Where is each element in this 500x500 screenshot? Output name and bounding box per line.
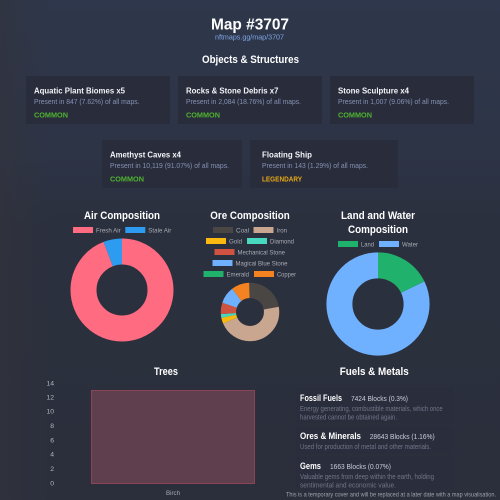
heading: trees: Trees xyxy=(154,366,178,378)
bar chart: trees: 4 xyxy=(50,452,54,458)
panel: fossil fuels xyxy=(296,388,454,423)
donut chart: land and water xyxy=(339,265,417,343)
legend: land and water: Land xyxy=(361,242,374,248)
heading: ore composition: Ore Composition xyxy=(210,210,290,222)
map link: nftmaps.gg/map/3707 xyxy=(215,32,284,42)
panel: ores and minerals: Used for production of metal and other materials. xyxy=(300,444,431,451)
legend: ore: Gold xyxy=(229,238,242,246)
bar chart: trees: 6 xyxy=(50,438,54,444)
panel: fossil fuels: Fossil Fuels xyxy=(300,393,342,403)
heading: fuels and metals: Fuels & Metals xyxy=(340,366,409,378)
card: rocks and stone debris: Rocks & Stone Debris x7 xyxy=(186,86,279,96)
heading: objects and structures: Objects & Structures xyxy=(202,54,299,66)
panel: fossil fuels: 7424 Blocks (0.3%) xyxy=(351,394,408,403)
card: amethyst caves: Amethyst Caves x4 xyxy=(110,150,181,160)
bar chart: trees: 2 xyxy=(50,466,54,473)
panel: ores and minerals xyxy=(296,426,454,454)
card: aquatic plant biomes xyxy=(26,76,170,124)
card: rocks and stone debris: Present in 2,084 (18.76%) of all maps. xyxy=(186,97,301,106)
bar chart: trees: 14 xyxy=(46,380,54,388)
card: floating ship: LEGENDARY xyxy=(262,174,302,184)
legend: air: Fresh Air xyxy=(96,228,121,234)
legend: ore: Coal xyxy=(236,228,249,234)
legend: ore xyxy=(204,227,297,278)
card: rocks and stone debris: COMMON xyxy=(186,110,220,120)
card: rocks and stone debris xyxy=(178,76,322,124)
card: aquatic plant biomes: Aquatic Plant Biomes x5 xyxy=(34,86,125,96)
panel: gems: Valuable gems from deep within the earth, holding xyxy=(300,474,434,481)
card: floating ship: Floating Ship xyxy=(262,150,312,160)
legend: ore: Iron xyxy=(276,228,287,234)
legend: air xyxy=(73,227,172,234)
legend: ore: Emerald xyxy=(226,272,249,278)
legend: land and water: Water xyxy=(402,242,419,248)
donut chart: air composition xyxy=(84,252,160,328)
panel: ores and minerals: 28643 Blocks (1.16%) xyxy=(370,432,435,441)
panel: ores and minerals: Ores & Minerals xyxy=(300,431,361,441)
card: aquatic plant biomes: Present in 847 (7.62%) of all maps. xyxy=(34,97,140,106)
panel: fossil fuels: harvested cannot be obtained again. xyxy=(300,414,397,422)
card: floating ship xyxy=(250,140,398,188)
bar chart: trees: 12 xyxy=(46,394,54,402)
panel: gems: sentimental and economic value. xyxy=(300,482,396,490)
panel: fossil fuels: Energy generating, combustible materials, which once xyxy=(300,406,443,413)
bar chart: trees: Birch xyxy=(166,490,180,497)
legend: ore: Copper xyxy=(277,272,297,278)
card: amethyst caves: COMMON xyxy=(110,174,144,184)
card: amethyst caves: Present in 10,119 (91.07%) of all maps. xyxy=(110,161,229,170)
heading: land and water composition: Land and Water xyxy=(341,210,416,222)
heading: air composition: Air Composition xyxy=(84,210,160,222)
legend: ore: Diamond xyxy=(270,238,294,246)
card: stone sculpture xyxy=(330,76,474,124)
card: amethyst caves xyxy=(102,140,242,188)
title: Map #3707 xyxy=(211,16,289,34)
card: floating ship: Present in 143 (1.29%) of all maps. xyxy=(262,161,368,170)
legend: air: Stale Air xyxy=(148,228,172,234)
panel: gems: 1663 Blocks (0.07%) xyxy=(330,462,391,471)
bar chart: trees: 10 xyxy=(46,408,54,416)
donut chart: ore composition xyxy=(228,290,272,334)
card: stone sculpture: Present in 1,007 (9.06%) of all maps. xyxy=(338,97,449,106)
bar chart: trees xyxy=(46,380,254,497)
card: aquatic plant biomes: COMMON xyxy=(34,110,68,120)
panel: gems: Gems xyxy=(300,461,321,471)
heading: land and water composition xyxy=(341,210,416,236)
legend: ore: Magical Blue Stone xyxy=(236,260,288,268)
legend: land and water xyxy=(338,241,419,248)
legend: ore: Mechanical Stone xyxy=(238,250,285,256)
bar chart: trees: 8 xyxy=(50,423,54,430)
card: stone sculpture: Stone Sculpture x4 xyxy=(338,86,409,96)
bar chart: trees: 0 xyxy=(50,480,54,488)
card: stone sculpture: COMMON xyxy=(338,110,372,120)
heading: land and water composition: Composition xyxy=(348,224,408,236)
panel: gems xyxy=(296,457,454,490)
